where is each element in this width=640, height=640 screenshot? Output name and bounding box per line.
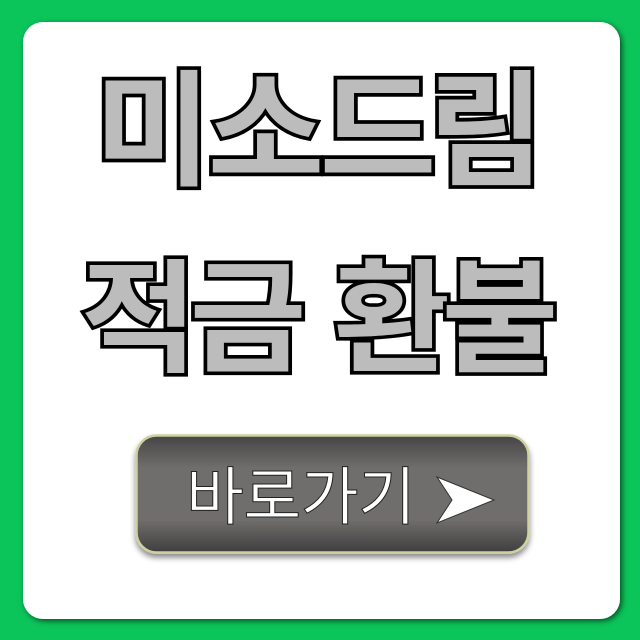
title line 2: 금 — [190, 252, 306, 389]
title line 2 — [81, 252, 558, 389]
icon: arrow — [437, 477, 494, 523]
button label: 바로가기 — [186, 463, 416, 533]
button body — [136, 436, 528, 552]
title line 2: 환 — [334, 252, 450, 389]
title line 2: 적 — [81, 252, 197, 389]
title line 2: 불 — [442, 252, 558, 389]
title line 1 — [95, 62, 544, 202]
title line 1: 드 — [320, 62, 436, 202]
title line 1: 소 — [208, 62, 324, 202]
title line 1: 림 — [428, 62, 544, 202]
button — [136, 436, 528, 552]
title line 1: 미 — [95, 62, 211, 202]
